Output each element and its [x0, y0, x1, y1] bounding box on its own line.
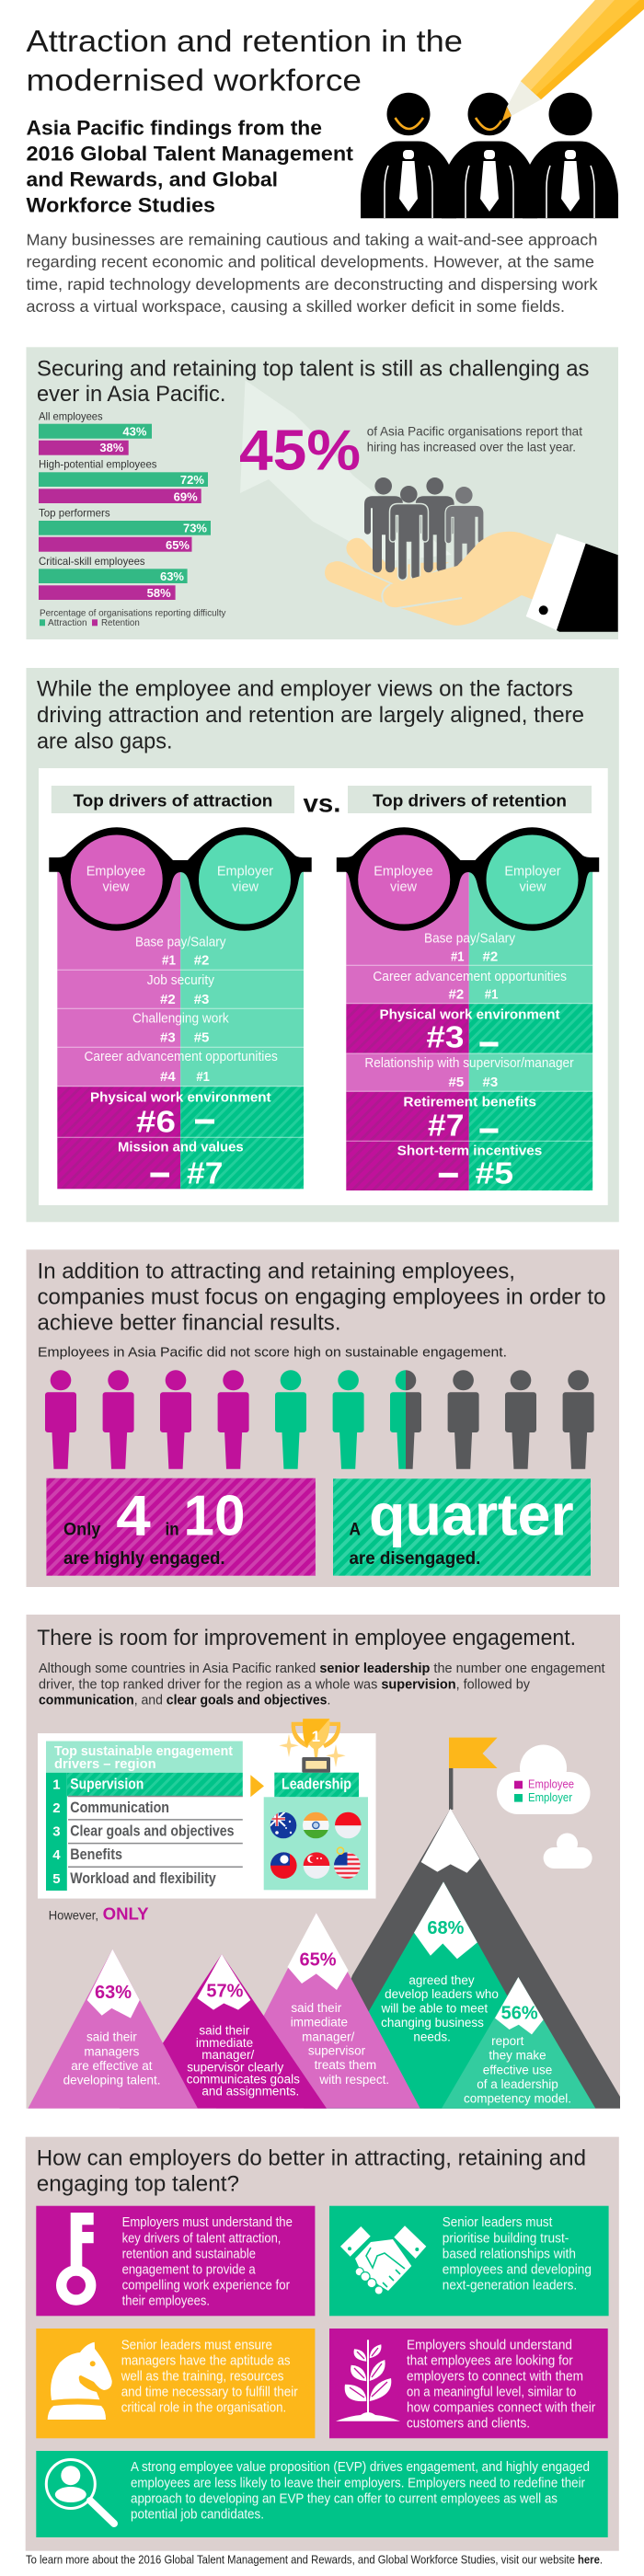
table: drivers of retention: Short-term incentives	[397, 1143, 542, 1158]
stat text: 65%: said their	[291, 2001, 342, 2015]
icon: hand holding people	[325, 477, 618, 632]
icon: summit flag	[449, 1738, 498, 1810]
card: employee value proposition: employees are less likely to leave their employers. Employers need to redefine their	[131, 2476, 585, 2490]
decorative cloud	[544, 1833, 592, 1869]
heading	[37, 677, 584, 753]
table: drivers of retention: #7	[428, 1108, 464, 1142]
callout: a quarter disengaged: A	[350, 1520, 361, 1539]
stat: 45%	[239, 420, 582, 483]
bar chart: reporting difficulty: 73%	[183, 522, 207, 535]
mountain: 68% employer	[313, 1881, 570, 2109]
card: managers aptitude: and time necessary to fulfill their	[121, 2386, 298, 2400]
icon: glasses with employee and employer view: view	[102, 880, 130, 894]
however only label: ONLY	[103, 1903, 149, 1923]
subtitle: and Rewards, and Global	[26, 167, 278, 190]
card: top engagement drivers: 5	[52, 1871, 61, 1887]
stat text: 63%: developing talent.	[63, 2074, 161, 2087]
callout: 4 in 10 highly engaged: are highly engaged.	[63, 1549, 225, 1569]
table: drivers of attraction: Career advancement opportunities	[85, 1050, 278, 1064]
bar chart: reporting difficulty: 38%	[99, 441, 124, 454]
heading: driving attraction and retention are largely aligned, there	[37, 703, 584, 728]
stat text: 57%: 57%	[206, 1981, 244, 2001]
card: top engagement drivers: Top sustainable engagement	[54, 1743, 233, 1759]
intro paragraph: time, rapid technology developments are deconstructing and dispersing work	[26, 275, 598, 293]
stat: 45%: 45%	[239, 420, 361, 483]
table: drivers of attraction: #1	[162, 953, 176, 969]
subheading: Employees in Asia Pacific did not score high on sustainable engagement.	[38, 1345, 507, 1360]
legend cloud: Employer	[528, 1790, 573, 1804]
stat text: 56%: they make	[489, 2049, 546, 2063]
mountain: 56% employer	[442, 1977, 595, 2109]
card: key drivers: key drivers of talent attraction,	[122, 2231, 281, 2246]
icon: three businessmen	[361, 93, 618, 218]
intro paragraph: Many businesses are remaining cautious and taking a wait-and-see approach	[26, 231, 598, 249]
mountain: dark summit	[304, 1809, 620, 2109]
card: trust-based relationships: based relationships with	[443, 2248, 576, 2262]
card: key drivers: their employees.	[122, 2294, 210, 2309]
callout: 4 in 10 highly engaged: 4	[116, 1484, 151, 1547]
header: top drivers of attraction: Top drivers of attraction	[74, 792, 272, 811]
stat text: 65%: with respect.	[318, 2073, 389, 2087]
table: drivers of retention: #1	[451, 949, 464, 964]
callout: a quarter disengaged: are disengaged.	[350, 1549, 480, 1569]
header: top drivers of retention: Top drivers of retention	[373, 792, 567, 811]
heading: There is room for improvement in employee engagement.	[37, 1626, 576, 1650]
stat text: 57%: supervisor clearly	[187, 2060, 284, 2074]
however only label	[49, 1903, 149, 1923]
card: managers aptitude: Senior leaders must ensure	[121, 2338, 272, 2352]
callout: 4 in 10 highly engaged	[46, 1478, 316, 1576]
arrow: upward growth	[240, 380, 452, 561]
stat text: 68%: changing business	[381, 2016, 484, 2030]
heading	[37, 356, 589, 407]
subtitle	[26, 117, 354, 216]
bar chart: reporting difficulty: Top performers	[39, 507, 110, 520]
table: drivers of retention: Physical work environment	[379, 1006, 560, 1022]
stat text: 56%: effective use	[483, 2063, 552, 2076]
card: managers aptitude: critical role in the organisation.	[121, 2401, 286, 2416]
panel: engaging employees	[26, 1249, 619, 1587]
bar chart: reporting difficulty: 65%	[166, 538, 190, 552]
card: meaningful connection: on a meaningful level, similar to	[407, 2386, 576, 2400]
legend cloud	[497, 1744, 591, 1814]
legend: Retention	[101, 617, 140, 628]
however only label: However,	[49, 1907, 98, 1922]
stat text: 65%: supervisor	[308, 2044, 366, 2058]
card: top engagement drivers: Communication	[70, 1799, 169, 1816]
card: employee value proposition: A strong employee value proposition (EVP) drives engagement, and highly engaged	[131, 2460, 590, 2475]
icon: glasses with employee and employer view (retention)	[337, 827, 599, 931]
table: drivers of retention: #5	[449, 1075, 464, 1090]
card: employee value proposition: potential job candidates.	[131, 2508, 264, 2523]
stat text: 57%: communicates goals	[187, 2072, 300, 2086]
card: top engagement drivers	[38, 1733, 375, 1899]
table: drivers of retention	[346, 871, 592, 1190]
header: top drivers of retention	[348, 786, 592, 813]
stat text: 56%: 56%	[501, 2003, 538, 2023]
icon: trophy	[279, 1719, 346, 1773]
table: drivers of attraction: Mission and values	[118, 1139, 244, 1155]
table: drivers of retention: Career advancement opportunities	[373, 970, 567, 984]
card: key drivers: retention and sustainable	[122, 2248, 256, 2262]
card: meaningful connection: employers to connect with them	[407, 2370, 583, 2385]
subtitle: Workforce Studies	[26, 193, 215, 216]
mountain: 57% employee	[120, 1954, 327, 2109]
intro paragraph	[26, 231, 598, 316]
stat text: 68%: develop leaders who	[385, 1987, 499, 2001]
table: drivers of attraction: Physical work environment	[90, 1090, 271, 1106]
intro paragraph: across a virtual workspace, causing a skilled worker deficit in some fields.	[26, 297, 565, 316]
stat: 45%: of Asia Pacific organisations report that	[367, 423, 582, 438]
card: meaningful connection: customers and clients.	[407, 2417, 530, 2432]
stat text: 68%	[381, 1918, 499, 2044]
heading: How can employers do better in attracting, retaining and	[37, 2145, 586, 2170]
table: drivers of attraction: #3	[194, 992, 209, 1007]
callout: 4 in 10 highly engaged: 10	[184, 1484, 245, 1547]
stat text: 56%: report	[491, 2034, 524, 2048]
title: modernised workforce	[26, 63, 362, 98]
card: employee value proposition: approach to developing an EVP they can offer to current employees as well as	[131, 2492, 558, 2507]
card: trust-based relationships	[329, 2206, 609, 2316]
icon: magnifying glass with person	[46, 2460, 114, 2524]
vs label: vs.	[304, 788, 340, 817]
stat text: 63%: are effective at	[71, 2059, 153, 2073]
pictogram: ten people	[45, 1370, 594, 1469]
stat text: 56%	[464, 2003, 571, 2105]
stat text: 63%: 63%	[95, 1983, 132, 2003]
heading: While the employee and employer views on the factors	[37, 677, 573, 702]
heading: Securing and retaining top talent is still as challenging as	[37, 356, 589, 381]
bar chart: reporting difficulty: All employees	[39, 410, 103, 423]
icon: glasses with employee and employer view (retention): view	[390, 880, 418, 894]
legend: Attraction	[48, 617, 87, 628]
stat text: 65%: immediate	[291, 2015, 348, 2030]
stat text: 63%: managers	[84, 2045, 140, 2059]
card: key drivers: compelling work experience for	[122, 2279, 290, 2294]
icon: glasses with employee and employer view (retention): view	[519, 880, 546, 894]
stat text: 68%: agreed they	[408, 1973, 475, 1987]
table: drivers of attraction: Job security	[147, 973, 215, 988]
panel: how can employers do better	[26, 2137, 619, 2551]
card: employee value proposition	[36, 2451, 608, 2537]
table: drivers of attraction: #2	[194, 953, 209, 969]
stat text: 63%	[63, 1983, 161, 2087]
heading: achieve better financial results.	[37, 1310, 340, 1335]
paragraph: communication, and clear goals and objectives.	[39, 1693, 330, 1708]
bar chart: reporting difficulty: High-potential employees	[39, 458, 156, 471]
footer note: To learn more about the 2016 Global Talent Management and Rewards, and Global Workforce Studies, visit our website here.	[26, 2553, 603, 2567]
card: trust-based relationships: prioritise building trust-	[443, 2231, 569, 2246]
stat text: 56%: of a leadership	[477, 2077, 558, 2091]
table: drivers of attraction: #1	[196, 1069, 210, 1085]
bar chart: reporting difficulty: 43%	[122, 424, 147, 438]
table: drivers of attraction: #2	[160, 992, 176, 1007]
stat text: 65%	[291, 1949, 389, 2087]
table: drivers of attraction	[57, 871, 304, 1190]
icon: glasses with employee and employer view: Employee	[86, 865, 145, 880]
table: drivers of retention: #1	[485, 987, 499, 1003]
card: top engagement drivers: Clear goals and objectives	[70, 1823, 234, 1840]
heading: companies must focus on engaging employees in order to	[37, 1284, 605, 1309]
legend: Percentage of organisations reporting difficulty	[40, 607, 226, 618]
mountain: 65% employee	[216, 1913, 420, 2109]
table: drivers of attraction: #3	[160, 1030, 176, 1046]
callout: a quarter disengaged	[333, 1478, 591, 1576]
table: drivers of retention: #3	[426, 1020, 464, 1054]
icon: glasses with employee and employer view: view	[232, 880, 259, 894]
table: drivers of retention: Base pay/Salary	[424, 931, 516, 946]
legend	[40, 607, 226, 628]
stat text: 68%: will be able to meet	[381, 2002, 488, 2015]
stat: 45%: hiring has increased over the last year.	[367, 440, 576, 454]
bar chart: reporting difficulty: 69%	[174, 489, 198, 503]
table: drivers of retention: Relationship with supervisor/manager	[364, 1056, 574, 1071]
card: top engagement drivers: 4	[52, 1847, 61, 1863]
table: drivers of attraction: Challenging work	[132, 1012, 229, 1027]
card: top engagement drivers: 2	[52, 1800, 61, 1816]
heading: engaging top talent?	[37, 2172, 239, 2197]
card: trust-based relationships: next-generation leaders.	[443, 2279, 577, 2294]
icon: key	[56, 2213, 96, 2306]
paragraph	[39, 1662, 605, 1708]
icon: glasses with employee and employer view: Employer	[217, 865, 273, 880]
bar chart: reporting difficulty: 58%	[147, 586, 171, 600]
card: key drivers: Employers must understand the	[122, 2215, 293, 2230]
stat text: 63%: said their	[86, 2030, 137, 2044]
legend cloud: Employee	[528, 1777, 574, 1791]
table: drivers of attraction: #7	[187, 1156, 223, 1190]
card: meaningful connection: Employers should understand	[407, 2338, 572, 2352]
table: drivers of retention: #2	[482, 949, 498, 964]
table: drivers of attraction: #4	[160, 1069, 176, 1085]
icon: glasses with employee and employer view	[49, 827, 312, 931]
bar chart: reporting difficulty: Critical-skill employees	[39, 555, 145, 568]
panel: securing and retaining top talent	[26, 347, 618, 639]
callout: a quarter disengaged: quarter	[369, 1481, 574, 1547]
card: key drivers: engagement to provide a	[122, 2263, 257, 2278]
paragraph: driver, the top ranked driver for the region as a whole was supervision, followed by	[39, 1677, 531, 1692]
icon: pencil drawing smiles	[396, 0, 644, 130]
table: drivers of retention: #3	[482, 1075, 498, 1090]
card: top engagement drivers: 3	[52, 1824, 61, 1840]
card: meaningful connection: that employees are looking for	[407, 2354, 573, 2369]
white comparison card	[39, 768, 608, 1205]
icon: trophy: 1	[312, 1728, 320, 1745]
table: drivers of attraction: Base pay/Salary	[135, 935, 226, 949]
card: key drivers	[36, 2206, 315, 2316]
stat text: 57%: manager/	[201, 2048, 255, 2062]
heading	[37, 1259, 605, 1335]
panel: employee and employer views	[26, 668, 619, 1222]
stat text: 57%: said their	[199, 2023, 250, 2037]
icon: glasses with employee and employer view (retention): Employer	[504, 865, 561, 880]
heading: In addition to attracting and retaining employees,	[37, 1259, 515, 1283]
header: top drivers of attraction	[52, 786, 294, 813]
stat text: 65%: manager/	[302, 2030, 354, 2044]
icon: glasses with employee and employer view (retention): Employee	[374, 865, 433, 880]
card: trust-based relationships: employees and developing	[443, 2263, 592, 2278]
subtitle: 2016 Global Talent Management	[26, 142, 354, 165]
stat text: 65%: treats them	[315, 2058, 376, 2072]
heading: ever in Asia Pacific.	[37, 382, 226, 407]
stat text: 65%: 65%	[299, 1949, 337, 1970]
heading	[37, 2145, 586, 2197]
subtitle: Asia Pacific findings from the	[26, 117, 322, 140]
card: managers aptitude: well as the training, resources	[121, 2370, 283, 2385]
bar chart: reporting difficulty	[39, 410, 211, 600]
bar chart: reporting difficulty: 63%	[160, 569, 184, 583]
mountain: 63% employee	[28, 1949, 198, 2109]
heading: are also gaps.	[37, 729, 173, 753]
table: drivers of attraction: #6	[136, 1105, 176, 1139]
callout: 4 in 10 highly engaged: in	[166, 1520, 179, 1539]
intro paragraph: regarding recent economic and political developments. However, at the same	[26, 253, 594, 271]
icon: chess knight	[48, 2342, 112, 2420]
panel: room for improvement	[26, 1615, 620, 2109]
card: top engagement drivers: drivers – region	[54, 1756, 156, 1772]
callout: 4 in 10 highly engaged: Only	[63, 1520, 101, 1539]
icon: plant	[336, 2340, 400, 2421]
icon: country flags	[270, 1811, 362, 1880]
stat text: 68%: needs.	[413, 2030, 451, 2044]
card: top engagement drivers: 1	[52, 1777, 61, 1793]
card: managers aptitude: managers have the aptitude as	[121, 2354, 291, 2369]
stat text: 57%	[187, 1981, 300, 2098]
table: drivers of attraction: #5	[194, 1030, 209, 1046]
title	[26, 25, 463, 98]
stat text: 56%: competency model.	[464, 2091, 571, 2105]
card: top engagement drivers: Benefits	[70, 1846, 122, 1863]
title: Attraction and retention in the	[26, 25, 463, 59]
card: top engagement drivers: Leadership	[282, 1776, 351, 1793]
card: meaningful connection: how companies connect with their	[407, 2401, 595, 2416]
bar chart: reporting difficulty: 72%	[180, 473, 204, 487]
icon: handshake	[340, 2225, 426, 2294]
stat text: 57%: immediate	[196, 2036, 253, 2050]
table: drivers of retention: #2	[449, 987, 464, 1003]
card: trust-based relationships: Senior leaders must	[443, 2215, 552, 2230]
table: drivers of retention: #5	[475, 1156, 513, 1190]
card: managers aptitude	[36, 2329, 315, 2438]
card: meaningful connection	[329, 2329, 608, 2438]
card: top engagement drivers: Supervision	[70, 1776, 144, 1793]
table: drivers of retention: Retirement benefits	[403, 1094, 536, 1110]
stat text: 68%: 68%	[427, 1918, 465, 1938]
stat text: 57%: and assignments.	[201, 2085, 299, 2098]
paragraph: Although some countries in Asia Pacific ranked senior leadership the number one engagement	[39, 1662, 605, 1676]
card: top engagement drivers: Workload and flexibility	[70, 1869, 216, 1887]
